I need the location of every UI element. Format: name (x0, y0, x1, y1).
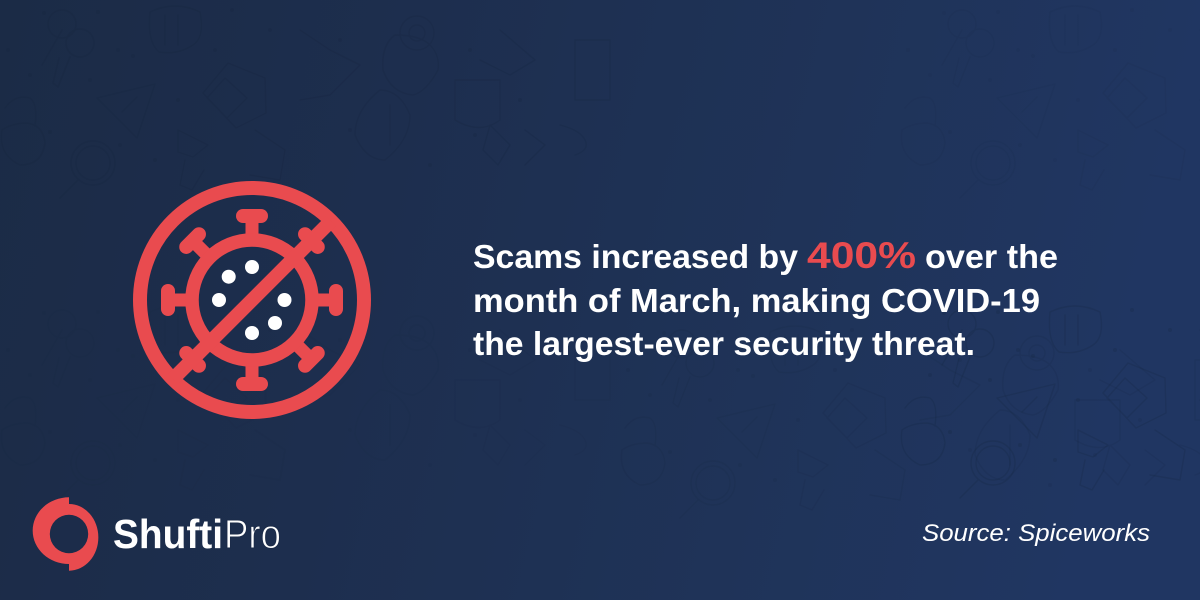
logo (33, 497, 281, 571)
line 1: Scams increased by (473, 239, 798, 276)
logo wordmark: Shufti (113, 511, 223, 557)
line 2: month of March, making COVID-19 (473, 283, 1040, 320)
virus spikes (161, 209, 343, 391)
outer prohibition ring (140, 188, 364, 412)
headline text (473, 235, 1058, 363)
virus body ring (192, 240, 312, 360)
virus dots (212, 260, 292, 340)
icon: crossed-out virus (140, 188, 364, 412)
line 3: the largest-ever security threat. (473, 326, 975, 363)
line 1 (473, 235, 1058, 276)
logo: Pro (224, 511, 281, 557)
prohibition slash (173, 221, 331, 379)
logo mark (33, 497, 98, 571)
line 1: over the (925, 239, 1058, 276)
highlighted figure: 400% (807, 235, 916, 276)
source note: Source: Spiceworks (922, 520, 1150, 547)
